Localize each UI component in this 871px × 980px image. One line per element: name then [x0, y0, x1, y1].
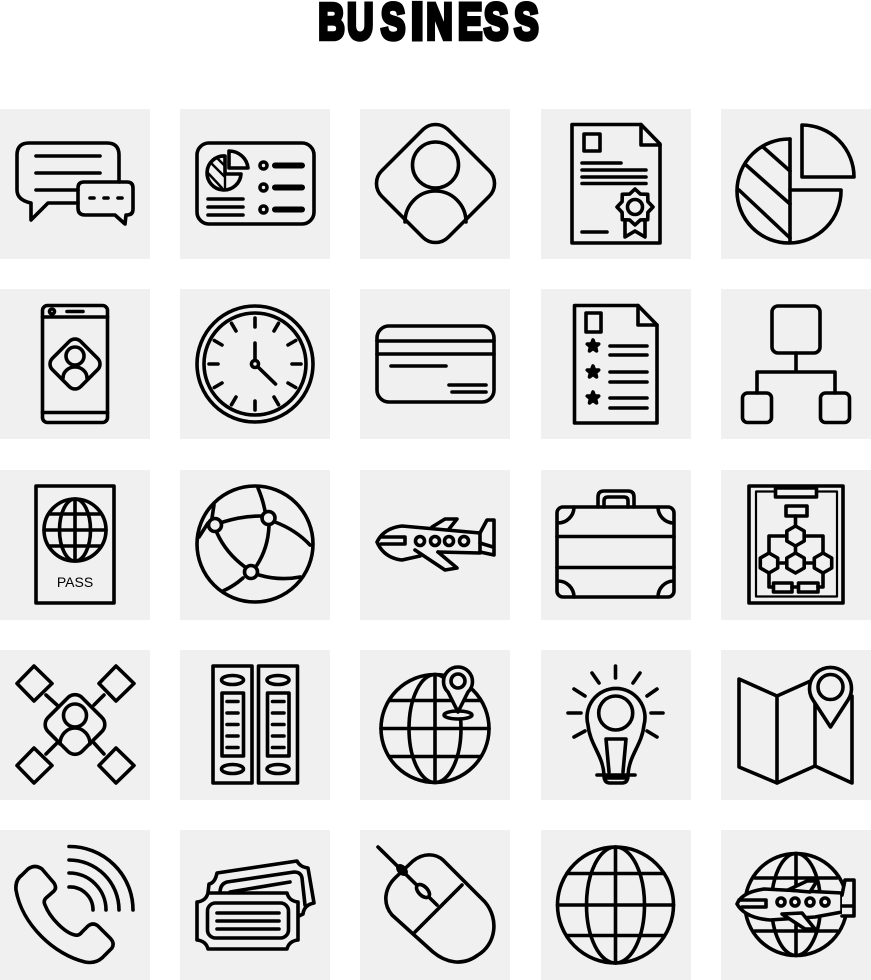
icon: presentation card: [197, 143, 314, 224]
panel: passport: [0, 470, 150, 620]
panel: folded map: [721, 650, 871, 800]
panel: globe with pin: [360, 650, 510, 800]
icon: user network: [17, 666, 134, 783]
icon: clipboard with flowchart: [749, 486, 843, 603]
panel: credit card: [360, 289, 510, 439]
icon: tickets: [197, 861, 314, 949]
icon: credit card: [377, 326, 494, 402]
icon: smartphone with user: [42, 306, 108, 422]
panel: phone call: [0, 830, 150, 980]
panel: hierarchy: [721, 289, 871, 439]
panel: tickets: [180, 830, 330, 980]
panel: computer mouse: [360, 830, 510, 980]
icon: two binders: [213, 666, 298, 783]
panel: pie chart: [721, 109, 871, 259]
icon: light bulb: [568, 666, 663, 783]
panel: chat bubbles: [0, 109, 150, 259]
panel: briefcase: [541, 470, 691, 620]
icon: computer mouse: [378, 847, 494, 962]
panel: presentation card: [180, 109, 330, 259]
icon: pie chart: [737, 125, 854, 243]
panel: light bulb: [541, 650, 691, 800]
panel: smartphone: [0, 289, 150, 439]
icon: chat bubbles: [17, 143, 133, 224]
icon: certificate document: [572, 124, 660, 243]
icon: globe with location pin: [381, 667, 489, 782]
icon: airplane: [377, 519, 494, 570]
panel: globe: [541, 830, 691, 980]
icon: plane over globe: [737, 854, 854, 956]
passport label: PASS: [57, 574, 93, 590]
icon: wall clock: [197, 306, 313, 422]
panel: airplane: [360, 470, 510, 620]
icon: briefcase: [557, 491, 674, 597]
panel: clock: [180, 289, 330, 439]
panel: star list document: [541, 289, 691, 439]
icon: document with star list: [574, 306, 657, 423]
icon: connected globe: [197, 486, 313, 602]
icon: telephone handset with signal: [16, 846, 133, 962]
panel: binders: [180, 650, 330, 800]
panel: user network: [0, 650, 150, 800]
icon: globe: [558, 847, 674, 963]
panel: plane over globe: [721, 830, 871, 980]
panel: network globe: [180, 470, 330, 620]
icon: folded map with pin: [739, 667, 852, 783]
panel: user diamond: [360, 109, 510, 259]
icon: passport: [36, 486, 114, 603]
panel: certificate: [541, 109, 691, 259]
icon: hierarchy diagram: [742, 306, 850, 422]
panel: clipboard flowchart: [721, 470, 871, 620]
icon: user in rounded diamond: [369, 117, 502, 250]
